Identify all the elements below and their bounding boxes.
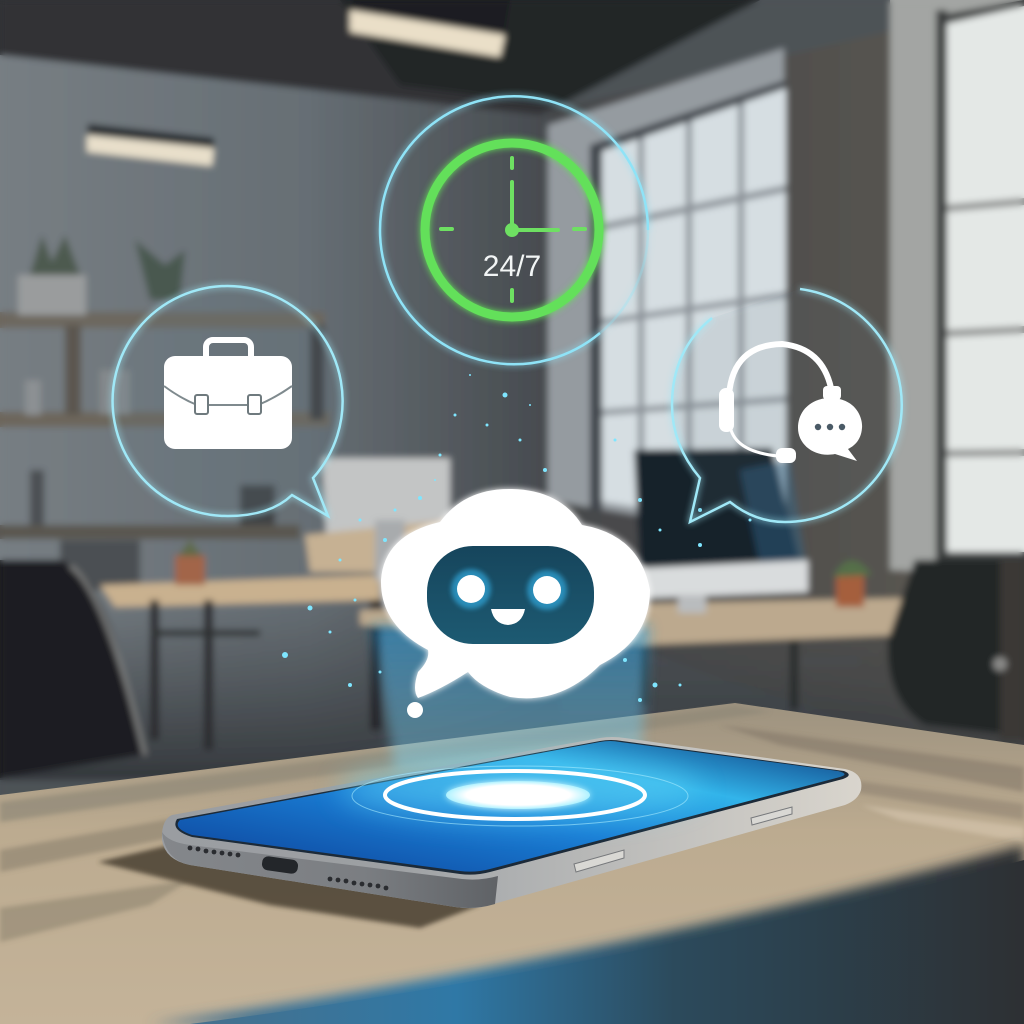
bubble: 24/7 clock [380, 96, 648, 364]
screen glow [340, 760, 700, 820]
phone screen [178, 741, 845, 872]
main window [548, 48, 786, 540]
clock hands and ticks [441, 158, 585, 301]
clock face [425, 143, 599, 317]
bubble: briefcase [113, 286, 343, 516]
robot face panel [427, 546, 594, 644]
small thought dot [407, 702, 423, 718]
robot eye glow [451, 569, 567, 610]
bubble: headset support [672, 289, 902, 522]
speech bubble outline [113, 286, 343, 516]
holographic pad rings [352, 766, 688, 826]
phone body [162, 737, 861, 908]
foreground dark edge of table [190, 860, 1024, 1024]
wooden table top [0, 703, 1024, 1024]
phone shadow [98, 845, 480, 928]
ceiling lights [87, 0, 510, 166]
hologram beam [372, 625, 650, 770]
clock ring outline [380, 96, 648, 364]
left monitor [305, 458, 450, 580]
particles [282, 374, 752, 702]
icon: headset [719, 344, 841, 463]
right window [890, 0, 1024, 575]
table shadow stripes [0, 706, 1024, 942]
icon: briefcase [164, 340, 292, 449]
phone ports and buttons [188, 807, 792, 890]
left chair [0, 560, 145, 778]
robot smile [491, 609, 525, 625]
speech bubble outline [672, 289, 902, 522]
smartphone [162, 737, 861, 908]
foreground soft edge of table [150, 845, 1024, 1024]
robot eyes [457, 575, 561, 604]
cloud shape [381, 489, 650, 698]
chatbot cloud icon [381, 489, 650, 718]
left wall shelves [0, 235, 330, 590]
phone bezel [175, 740, 849, 875]
icon: chat bubble [798, 398, 862, 461]
clock label: 24/7 [483, 250, 541, 283]
right desk with monitor and chair [360, 448, 1024, 740]
left desk [100, 540, 382, 750]
